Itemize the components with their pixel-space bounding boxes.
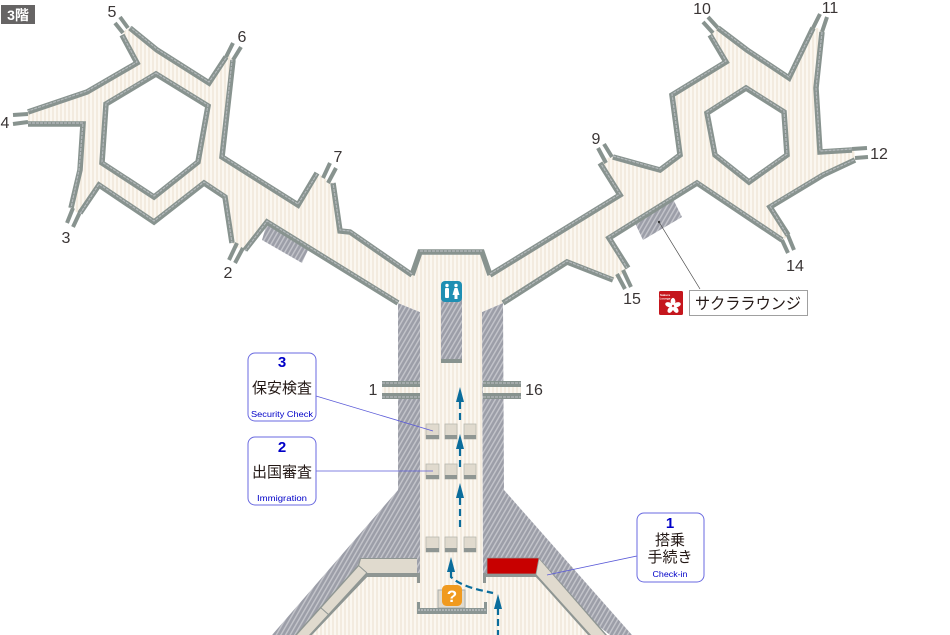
callout: check-in — [547, 513, 704, 582]
immigration booths — [426, 464, 476, 479]
gate numbers — [1, 0, 888, 399]
callout: check-in: 搭乗 — [655, 532, 685, 549]
callout: immigration: Immigration — [257, 493, 307, 503]
callout: immigration — [248, 437, 433, 505]
security check booths — [426, 424, 476, 439]
gate numbers: 4 — [1, 115, 10, 132]
information desk: ? — [447, 587, 457, 606]
gate numbers: 12 — [870, 146, 888, 163]
gate numbers: 1 — [369, 382, 378, 399]
panel: left check-in counters — [295, 558, 420, 635]
check-in counter red — [487, 558, 539, 574]
badge: floor 3F — [1, 5, 35, 24]
badge: floor 3F: 3階 — [7, 7, 29, 23]
callout: check-in: 手続き — [647, 549, 693, 566]
gate numbers: 14 — [786, 258, 804, 275]
gate numbers: 5 — [108, 4, 117, 21]
callout: security check — [248, 353, 433, 431]
gate numbers: 7 — [334, 149, 343, 166]
callout: check-in: Check-in — [652, 569, 688, 579]
route arrows — [447, 387, 502, 635]
callout: Sakura Lounge — [658, 221, 808, 316]
callout: security check: 3 — [278, 354, 286, 371]
callout: Sakura Lounge: サクララウンジ — [695, 295, 801, 313]
callout: immigration: 2 — [278, 439, 286, 456]
gate numbers: 9 — [592, 131, 601, 148]
icon: Sakura Lounge — [659, 291, 683, 315]
icon: toilets — [441, 281, 462, 302]
panel: central island — [441, 290, 462, 363]
gate numbers: 2 — [224, 265, 233, 282]
gate numbers: 6 — [238, 29, 247, 46]
callout: security check: 保安検査 — [252, 380, 312, 397]
callout: check-in: 1 — [666, 515, 674, 532]
callout: immigration: 出国審査 — [252, 464, 312, 481]
icon: Sakura Lounge: Sakura — [660, 293, 670, 297]
callout: security check: Security Check — [251, 409, 314, 419]
gate numbers: 10 — [693, 1, 711, 18]
gate connectors 1 and 16 — [382, 381, 521, 399]
entry booths — [426, 537, 476, 552]
gate numbers: 15 — [623, 291, 641, 308]
gate numbers: 11 — [822, 0, 838, 17]
icon: Sakura Lounge: Lounge — [660, 296, 671, 300]
panel: right check-in counters — [483, 558, 607, 635]
panel: hatched back-of-house areas — [262, 197, 682, 635]
panel: walls — [13, 14, 868, 303]
information desk — [417, 585, 487, 614]
gate numbers: 16 — [525, 382, 543, 399]
gate numbers: 3 — [62, 230, 71, 247]
